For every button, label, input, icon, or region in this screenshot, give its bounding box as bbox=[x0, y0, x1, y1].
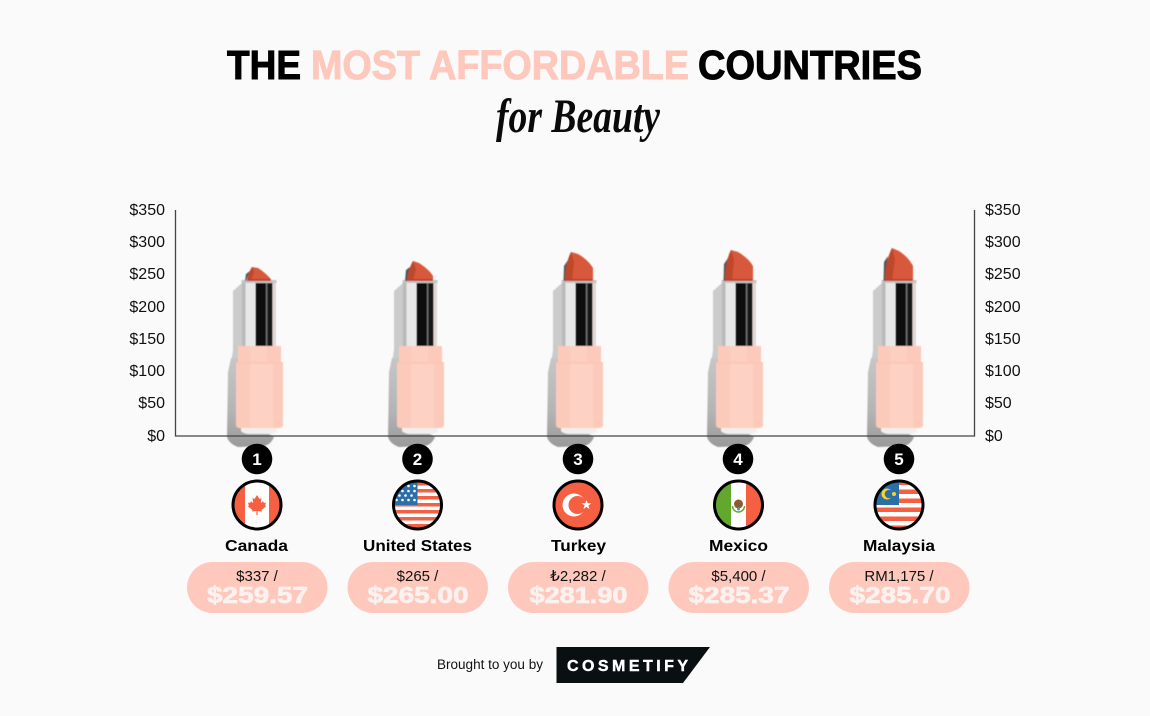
icon: Mexico flag bbox=[714, 480, 764, 530]
price pill: Turkey: ₺2,282 / bbox=[550, 568, 607, 585]
title bbox=[227, 42, 922, 88]
rank badge 5 bbox=[884, 444, 914, 474]
icon: Canada flag bbox=[232, 480, 282, 530]
left axis labels: $350 bbox=[129, 202, 165, 219]
lipstick 3: Turkey bbox=[547, 252, 603, 447]
icon: Malaysia flag bbox=[874, 480, 924, 530]
price pill: United States bbox=[348, 562, 488, 613]
icon: United States flag bbox=[392, 480, 442, 530]
rank badge 1: 1 bbox=[252, 450, 262, 469]
left axis labels: $150 bbox=[129, 331, 165, 348]
right axis labels: $300 bbox=[985, 234, 1021, 251]
icon: Turkey flag bbox=[553, 480, 603, 530]
right axis labels: $200 bbox=[985, 299, 1021, 316]
price pill: Mexico: $285.37 bbox=[688, 582, 790, 608]
credit text: Brought to you by bbox=[437, 657, 543, 672]
left axis labels: $250 bbox=[129, 266, 165, 283]
country name: Canada: Canada bbox=[225, 538, 288, 555]
right axis labels: $350 bbox=[985, 202, 1021, 219]
rank badge 1 bbox=[242, 444, 272, 474]
price pill: Malaysia: RM1,175 / bbox=[864, 568, 934, 585]
title: COUNTRIES bbox=[698, 42, 922, 88]
title: MOST AFFORDABLE bbox=[311, 42, 689, 88]
rank badge 4: 4 bbox=[733, 450, 743, 469]
price pill: Turkey bbox=[508, 562, 648, 613]
title: THE bbox=[227, 42, 301, 88]
lipstick 4: Mexico bbox=[707, 250, 763, 447]
price pill: United States: $265.00 bbox=[368, 582, 468, 608]
rank badge 3: 3 bbox=[573, 450, 583, 469]
lipstick 1: Canada bbox=[227, 267, 283, 447]
rank badge 5: 5 bbox=[894, 450, 904, 469]
left axis labels: $0 bbox=[147, 428, 165, 445]
price pill: Mexico bbox=[668, 562, 809, 613]
country name: Malaysia: Malaysia bbox=[863, 538, 935, 555]
chart bbox=[129, 202, 1021, 447]
left axis labels: $300 bbox=[129, 234, 165, 251]
right axis labels: $0 bbox=[985, 428, 1003, 445]
right axis labels: $100 bbox=[985, 363, 1021, 380]
price pill: Canada: $337 / bbox=[236, 568, 279, 585]
logo: Cosmetify: COSMETIFY bbox=[567, 658, 688, 675]
country name: Mexico: Mexico bbox=[709, 538, 768, 555]
price pill: Mexico: $5,400 / bbox=[711, 568, 766, 585]
price pill: Canada: $259.57 bbox=[207, 582, 308, 608]
left axis labels: $100 bbox=[129, 363, 165, 380]
logo: Cosmetify bbox=[556, 647, 710, 683]
right axis labels bbox=[985, 202, 1021, 445]
subtitle: for Beauty bbox=[496, 90, 661, 143]
lipstick 5: Malaysia bbox=[867, 248, 923, 447]
country name: Turkey: Turkey bbox=[551, 538, 606, 555]
country name: United States: United States bbox=[363, 538, 472, 555]
right axis labels: $250 bbox=[985, 266, 1021, 283]
price pill: Canada bbox=[187, 562, 328, 613]
price pill: Malaysia: $285.70 bbox=[850, 582, 950, 608]
axes bbox=[176, 210, 974, 436]
right axis labels: $150 bbox=[985, 331, 1021, 348]
price pill: Turkey: $281.90 bbox=[530, 582, 628, 608]
price pill: United States: $265 / bbox=[397, 568, 439, 585]
left axis labels: $200 bbox=[129, 299, 165, 316]
left axis labels: $50 bbox=[138, 395, 165, 412]
rank badge 4 bbox=[723, 444, 753, 474]
price pill: Malaysia bbox=[829, 562, 970, 613]
rank badge 3 bbox=[563, 444, 593, 474]
rank badge 2 bbox=[402, 444, 433, 474]
rank badge 2: 2 bbox=[413, 450, 422, 469]
left axis labels bbox=[129, 202, 165, 445]
lipstick 2: United States bbox=[388, 261, 444, 447]
right axis labels: $50 bbox=[985, 395, 1012, 412]
